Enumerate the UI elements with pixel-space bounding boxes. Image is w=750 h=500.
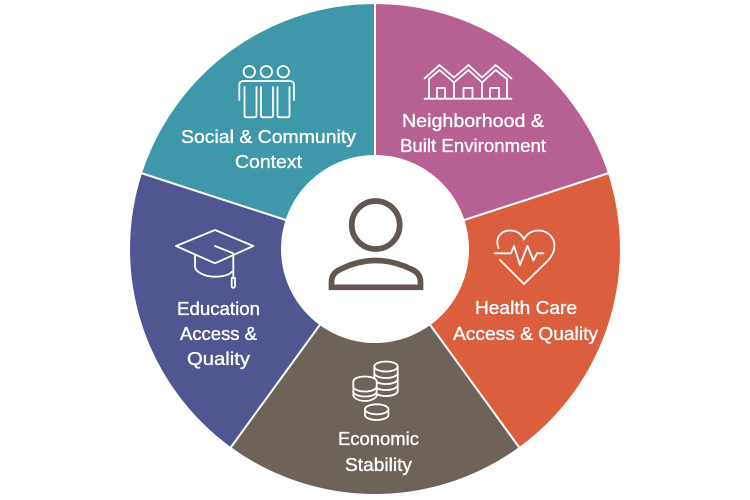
icon: houses (424, 65, 512, 99)
label: neighborhood: Neighborhood & (402, 111, 544, 131)
label: access and: Access & (180, 324, 257, 344)
label: quality: Quality (187, 349, 250, 369)
icon: group of people (239, 66, 294, 117)
label: social and community: Social & Community (181, 127, 356, 147)
label: education: Education (177, 299, 260, 319)
icon: graduation cap (176, 230, 253, 288)
label: economic: Economic (338, 429, 419, 449)
panel: health care access and quality (375, 173, 620, 447)
icon: person (332, 201, 420, 287)
center circle with person (281, 155, 469, 343)
label: context: Context (235, 152, 302, 172)
icon: heart with pulse (494, 230, 554, 284)
label: stability: Stability (345, 455, 412, 475)
panel: economic stability (231, 249, 519, 494)
label: access and quality: Access & Quality (453, 324, 598, 344)
panel: education access and quality (130, 173, 375, 447)
label: health care: Health Care (475, 298, 577, 318)
panel: neighborhood and built environment (375, 4, 608, 249)
icon: coins (353, 362, 398, 420)
label: built environment: Built Environment (400, 136, 546, 156)
panel: social and community context (142, 4, 375, 249)
